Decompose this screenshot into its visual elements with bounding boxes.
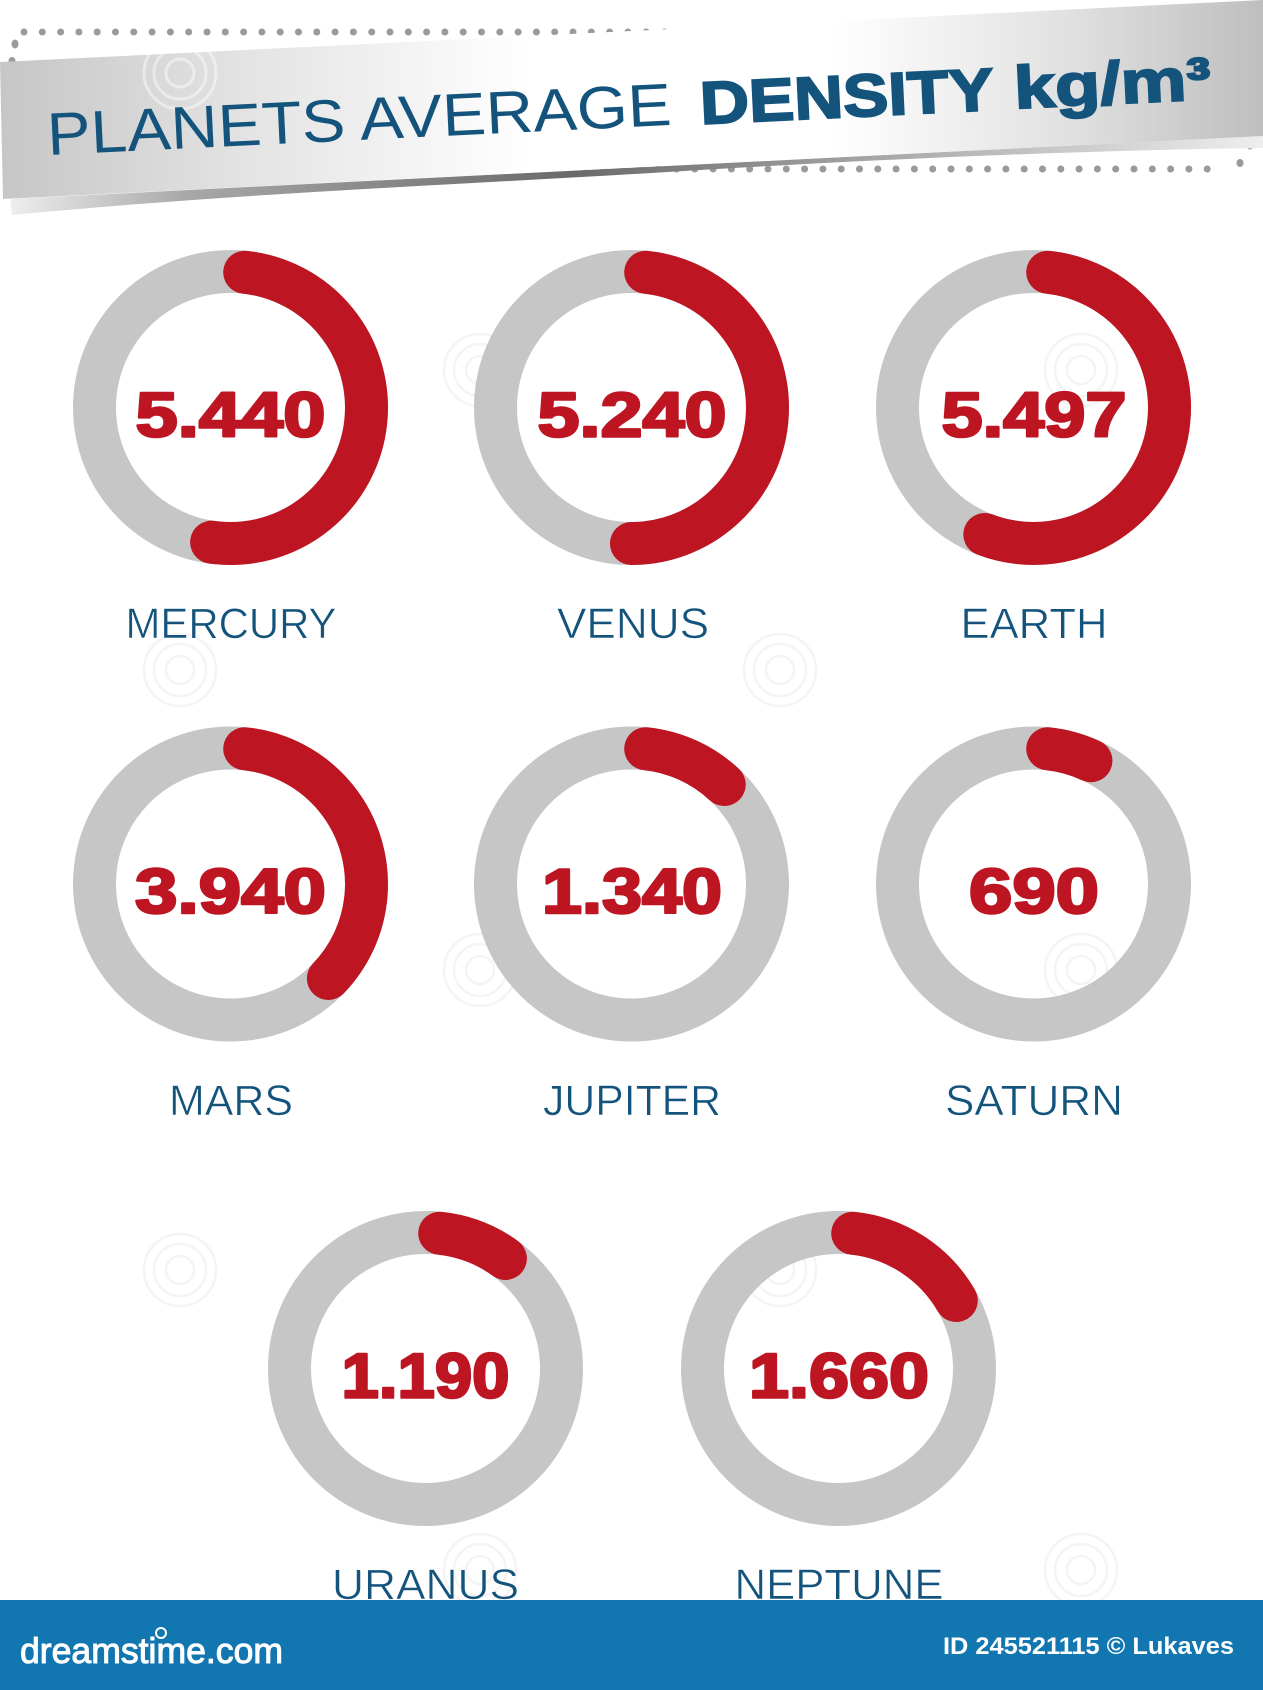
footer bar (0, 1600, 1263, 1690)
panel: Saturn: 690 (969, 857, 1099, 927)
banner band (0, 0, 1263, 199)
panel: Jupiter: JUPITER (543, 1077, 721, 1125)
panel: Uranus: 1.190 (342, 1342, 510, 1412)
panel: Venus: 5.240 (538, 380, 726, 450)
panel: Mercury: 5.440 (136, 380, 326, 450)
panel: Uranus (276, 1219, 575, 1609)
header banner (0, 0, 1263, 215)
banner shadow (10, 136, 1263, 215)
panel: Jupiter: 1.340 (542, 857, 722, 927)
panel: Neptune: NEPTUNE (734, 1561, 944, 1609)
panel: Mercury (81, 258, 380, 648)
panel: Mars: 3.940 (135, 857, 326, 927)
title: regular part: PLANETS AVERAGE (45, 71, 673, 168)
panel: Earth (884, 258, 1183, 648)
panel: Saturn (884, 735, 1183, 1125)
title: bold part: DENSITY (698, 56, 995, 137)
panel: Mercury: MERCURY (126, 600, 336, 648)
panel: Earth: 5.497 (942, 380, 1126, 450)
panel: Venus (482, 258, 781, 648)
panel: Venus: VENUS (557, 600, 709, 648)
banner watermark spirals (144, 31, 816, 109)
footer logo: dreamstime.com (20, 1630, 283, 1671)
dotted frame (8, 32, 1254, 169)
panel: Saturn: SATURN (945, 1077, 1123, 1125)
watermark spirals (144, 334, 1117, 1606)
panel: Uranus: URANUS (332, 1561, 519, 1609)
panel: Jupiter (482, 735, 781, 1125)
panel: Mars (81, 735, 380, 1125)
panel: Earth: EARTH (960, 600, 1108, 648)
title: unit: kg/m³ (1012, 45, 1212, 121)
panel: Neptune: 1.660 (749, 1342, 929, 1412)
panel: Neptune (689, 1219, 988, 1609)
panel: Mars: MARS (169, 1077, 293, 1125)
footer credit: ID 245521115 © Lukaves (943, 1633, 1234, 1660)
